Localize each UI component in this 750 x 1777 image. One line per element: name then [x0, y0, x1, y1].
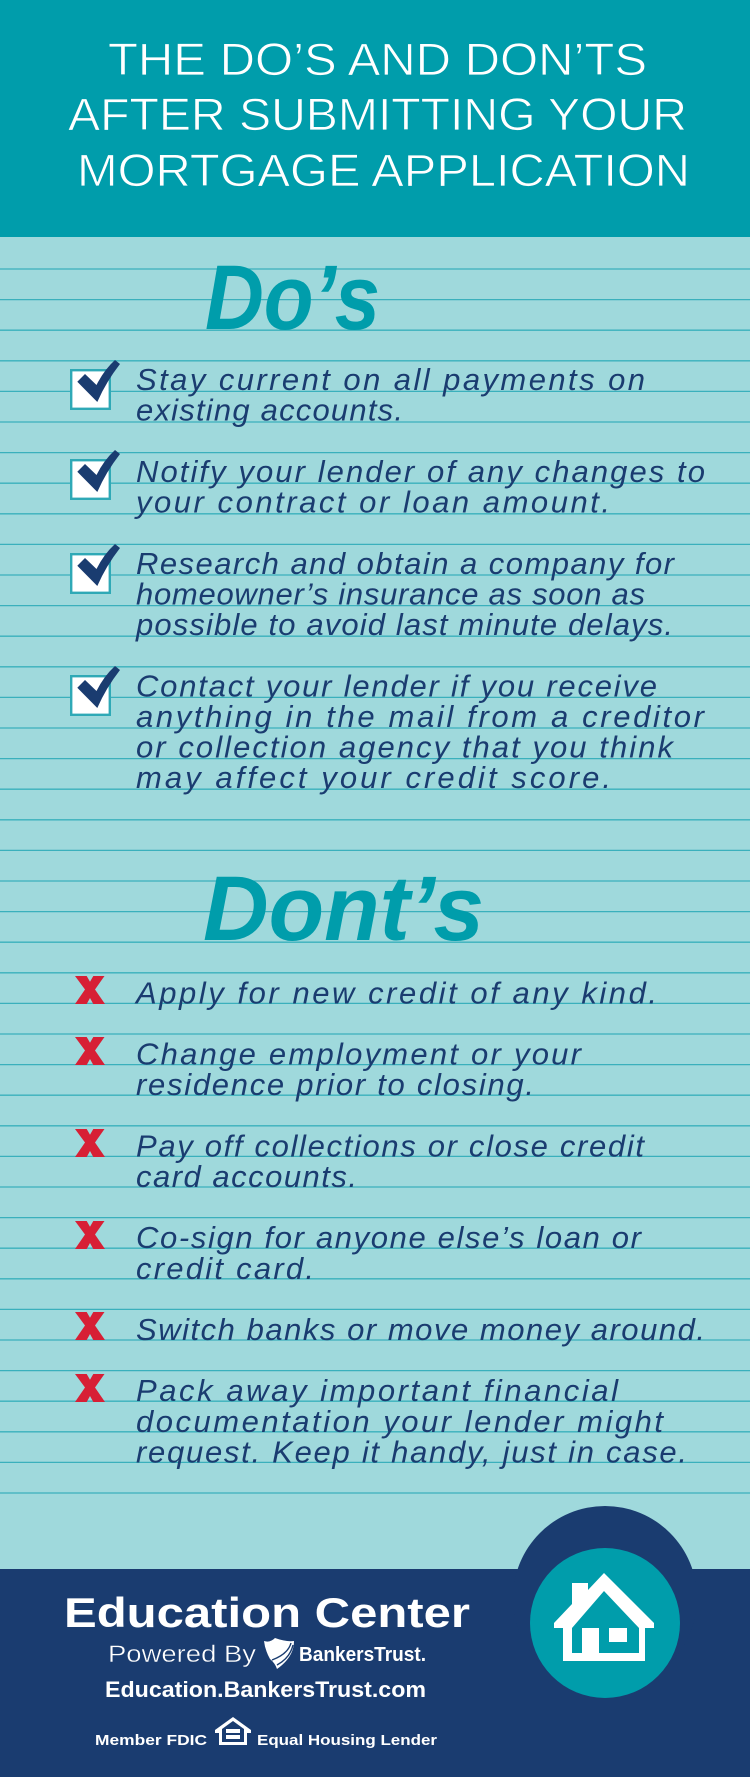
icon: red x [75, 1037, 105, 1065]
icon: red x [75, 976, 105, 1004]
text: card accounts. [136, 1159, 357, 1194]
text: Contact your lender if you receive [136, 668, 657, 703]
item: research insurance [71, 544, 676, 642]
panel: don'ts [75, 858, 705, 1469]
text: or collection agency that you think [136, 730, 674, 765]
footer title: Education Center [64, 1589, 470, 1636]
text: Switch banks or move money around. [136, 1312, 705, 1347]
powered by line: BankersTrust. [299, 1644, 426, 1666]
item: employment [75, 1037, 583, 1102]
item: switch banks [75, 1312, 705, 1347]
legal line [95, 1717, 437, 1749]
icon: shield logo [264, 1638, 294, 1669]
website url: Education.BankersTrust.com [105, 1677, 426, 1702]
text: Change employment or your [136, 1037, 583, 1072]
text: Research and obtain a company for [136, 546, 676, 581]
icon: checked box [71, 544, 120, 593]
item: notify lender [71, 450, 705, 520]
icon: equal housing [215, 1717, 251, 1745]
heading: do's: Do’s [205, 247, 380, 349]
text: homeowner’s insurance as soon as [136, 577, 645, 612]
panel: do's [71, 247, 706, 795]
text: possible to avoid last minute delays. [135, 607, 673, 642]
title: THE DO’S AND DON’TS [108, 34, 647, 85]
text: residence prior to closing. [136, 1067, 534, 1102]
text: Apply for new credit of any kind. [134, 975, 657, 1010]
item: new credit [75, 975, 657, 1010]
text [136, 1037, 583, 1102]
text: Pay off collections or close credit [136, 1128, 645, 1163]
text: Stay current on all payments on [136, 362, 645, 397]
text [136, 1128, 645, 1194]
title: MORTGAGE APPLICATION [77, 145, 690, 196]
icon: red x [75, 1129, 105, 1157]
item: stay current [71, 360, 645, 428]
text [136, 1220, 643, 1286]
text [136, 1373, 687, 1469]
powered by line: Powered By [108, 1641, 256, 1668]
heading: don'ts: Dont’s [203, 858, 484, 960]
item: co-sign [75, 1220, 643, 1286]
footer bump [513, 1506, 697, 1690]
icon: red x [75, 1221, 105, 1249]
text [136, 668, 706, 795]
title: AFTER SUBMITTING YOUR [68, 89, 687, 140]
text: existing accounts. [136, 393, 403, 428]
item: pack away [75, 1373, 687, 1469]
icon: red x [75, 1312, 105, 1340]
text: your contract or loan amount. [134, 485, 610, 520]
icon: checked box [71, 360, 120, 409]
item: contact lender [71, 666, 706, 795]
text: Notify your lender of any changes to [136, 454, 705, 489]
legal line: Member FDIC [95, 1732, 207, 1749]
text: Pack away important financial [136, 1373, 619, 1408]
title [68, 34, 690, 196]
icon: checked box [71, 666, 120, 715]
powered by line [108, 1638, 426, 1669]
text: may affect your credit score. [136, 760, 611, 795]
text [136, 362, 645, 428]
text: Co-sign for anyone else’s loan or [136, 1220, 643, 1255]
text [135, 546, 676, 642]
text [134, 454, 705, 520]
footer band [0, 1506, 750, 1777]
text: anything in the mail from a creditor [136, 699, 706, 734]
icon: red x [75, 1374, 105, 1402]
icon: checked box [71, 450, 120, 499]
text: credit card. [136, 1251, 314, 1286]
legal line: Equal Housing Lender [257, 1732, 437, 1749]
text: request. Keep it handy, just in case. [136, 1434, 687, 1469]
item: collections [75, 1128, 645, 1194]
text: documentation your lender might [136, 1404, 664, 1439]
icon: house badge [530, 1548, 680, 1698]
header banner [0, 0, 750, 237]
